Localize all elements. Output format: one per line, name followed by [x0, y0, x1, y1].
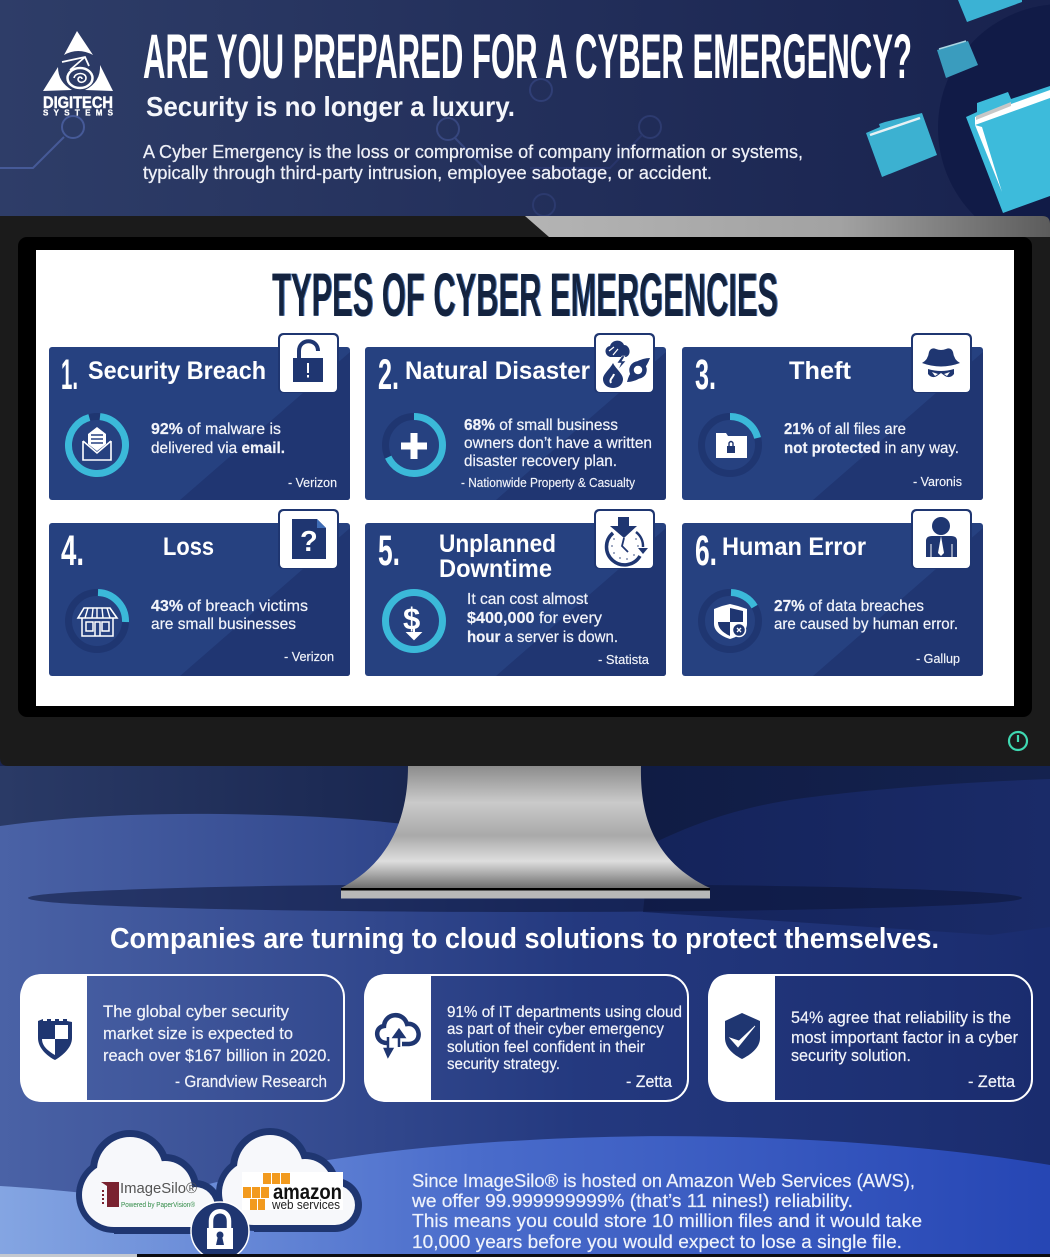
- lower background: [0, 766, 1050, 1257]
- icon box: person with tie: [911, 509, 972, 569]
- text: - Zetta: [968, 1072, 1016, 1091]
- text: 54% agree that reliability is the: [791, 1008, 1011, 1027]
- source: - Verizon: [284, 650, 334, 664]
- heading: Human Error: [722, 533, 866, 561]
- icon box: storm, fire and hurricane: [594, 333, 655, 393]
- source: - Varonis: [913, 475, 962, 489]
- heading: Unplanned: [439, 530, 556, 558]
- panel: 1 security breach: [49, 333, 350, 500]
- icon box: open padlock: [278, 333, 339, 393]
- source: - Nationwide Property & Casualty: [461, 476, 636, 490]
- stat text: $400,000 for every: [467, 610, 602, 627]
- icon: power button: [1009, 732, 1027, 750]
- text: security solution.: [791, 1046, 911, 1065]
- text: security strategy.: [447, 1056, 560, 1073]
- panel: IT departments: [365, 974, 688, 1102]
- source: - Statista: [598, 653, 649, 667]
- intro paragraph: typically through third-party intrusion, employee sabotage, or accident.: [143, 162, 712, 183]
- AWS reliability text: 10,000 years before you would expect to lose a single file.: [412, 1231, 902, 1252]
- AWS reliability text: Since ImageSilo® is hosted on Amazon Web Services (AWS),: [412, 1170, 915, 1191]
- logo: Digitech Systems: [43, 31, 114, 118]
- ring with dollar icon: [386, 592, 442, 650]
- icon: shield: [38, 1019, 72, 1060]
- ImageSilo logo: [101, 1180, 197, 1209]
- subtitle: Security is no longer a luxury.: [146, 91, 515, 122]
- stat text: [784, 421, 959, 457]
- stat text: It can cost almost: [467, 591, 589, 608]
- stat text: [151, 598, 308, 633]
- heading: cloud solutions: Companies are turning to cloud solutions to protect themselves.: [110, 923, 939, 955]
- stat text: disaster recovery plan.: [464, 453, 617, 470]
- stat text: 68% of small business: [464, 417, 618, 434]
- bottom edge strip: [0, 1254, 1050, 1257]
- cloud: ImageSilo: [76, 1130, 222, 1234]
- AWS reliability text: we offer 99.999999999% (that’s 11 nines!) reliability.: [411, 1190, 853, 1211]
- intro paragraph: A Cyber Emergency is the loss or compromise of company information or systems,: [143, 141, 803, 162]
- panel: market size: [21, 974, 344, 1102]
- text: 91% of IT departments using cloud: [447, 1004, 682, 1021]
- ring with plus icon: [386, 416, 442, 474]
- icon box: unknown document: [278, 509, 339, 569]
- ImageSilo logo: ImageSilo®: [120, 1180, 197, 1197]
- panel: 1 security breach: 1.: [61, 351, 78, 399]
- stat text: are caused by human error.: [774, 616, 958, 633]
- stat text: [467, 591, 618, 646]
- source: - Verizon: [288, 476, 337, 490]
- ring with shield icon: [701, 592, 759, 650]
- heading: Natural Disaster: [405, 357, 590, 385]
- number: 4.: [61, 527, 84, 575]
- ImageSilo logo: Powered by PaperVision®: [121, 1201, 196, 1209]
- logo: Digitech Systems: SYSTEMS: [43, 108, 114, 118]
- ring with dollar icon: $: [403, 601, 420, 636]
- heading: [439, 530, 556, 583]
- cloud: Amazon Web Services: [216, 1128, 362, 1232]
- icon box: thief: [911, 333, 972, 393]
- AWS logo: web services: [271, 1197, 340, 1212]
- logo: Digitech Systems: DIGITECH: [43, 93, 113, 112]
- number: 5.: [378, 527, 400, 575]
- text: [447, 1004, 682, 1091]
- text: [103, 1002, 331, 1091]
- text: most important factor in a cyber: [791, 1028, 1018, 1047]
- AWS logo: [242, 1172, 343, 1212]
- AWS reliability text: This means you could store 10 million files and it would take: [412, 1210, 922, 1231]
- intro paragraph: [143, 141, 803, 183]
- AWS logo: amazon: [273, 1181, 342, 1204]
- stat text: hour a server is down.: [467, 629, 618, 646]
- ring with storefront icon: [68, 592, 126, 650]
- panel: 6 human error: [682, 509, 983, 676]
- icon: cloud with arrows: [377, 1015, 419, 1056]
- monitor: [0, 216, 1050, 766]
- panel: 5 unplanned downtime: [365, 509, 666, 676]
- stat text: [151, 421, 285, 457]
- heading: Theft: [789, 357, 852, 385]
- text: - Zetta: [626, 1072, 673, 1091]
- heading: Downtime: [439, 555, 552, 583]
- stat text: 92% of malware is: [151, 421, 281, 438]
- monitor stand: [28, 766, 1022, 912]
- text: - Grandview Research: [175, 1072, 327, 1091]
- number: 3.: [695, 351, 716, 399]
- panel: 2 natural disaster: [365, 333, 666, 500]
- stat text: 27% of data breaches: [774, 598, 924, 615]
- stat text: [774, 598, 958, 633]
- text: [791, 1008, 1018, 1091]
- heading: Security Breach: [88, 357, 266, 385]
- panel: 3 theft: [682, 333, 983, 500]
- icon box: clock with arrow: [594, 509, 655, 569]
- circuit decoration: [0, 79, 661, 216]
- text: The global cyber security: [103, 1002, 289, 1021]
- panel: 4 loss: [49, 509, 350, 676]
- dark circle behind folders: [938, 4, 1050, 252]
- stat text: owners don’t have a written: [464, 435, 652, 452]
- AWS reliability text: [411, 1170, 922, 1252]
- icon box: unknown document: ?: [300, 526, 318, 558]
- text: solution feel confident in their: [447, 1039, 645, 1056]
- stat text: 21% of all files are: [784, 421, 906, 438]
- ring with folder icon: [702, 416, 758, 474]
- stat text: [464, 417, 652, 470]
- stat text: 43% of breach victims: [151, 598, 308, 615]
- number: 6.: [695, 527, 717, 575]
- header background: [0, 0, 1050, 216]
- icon: padlock: [191, 1202, 249, 1257]
- stat text: not protected in any way.: [784, 440, 959, 457]
- stat text: delivered via email.: [151, 440, 285, 457]
- number: 2.: [378, 351, 399, 399]
- source: - Gallup: [916, 652, 960, 666]
- ring with email icon: [66, 414, 128, 476]
- heading: Loss: [163, 533, 214, 561]
- text: market size is expected to: [103, 1024, 293, 1043]
- text: as part of their cyber emergency: [447, 1021, 664, 1038]
- text: reach over $167 billion in 2020.: [103, 1046, 331, 1065]
- stat text: are small businesses: [151, 616, 296, 633]
- icon: check shield: [725, 1013, 760, 1059]
- icon: folders: [866, 0, 1050, 213]
- panel: reliability: [709, 974, 1032, 1102]
